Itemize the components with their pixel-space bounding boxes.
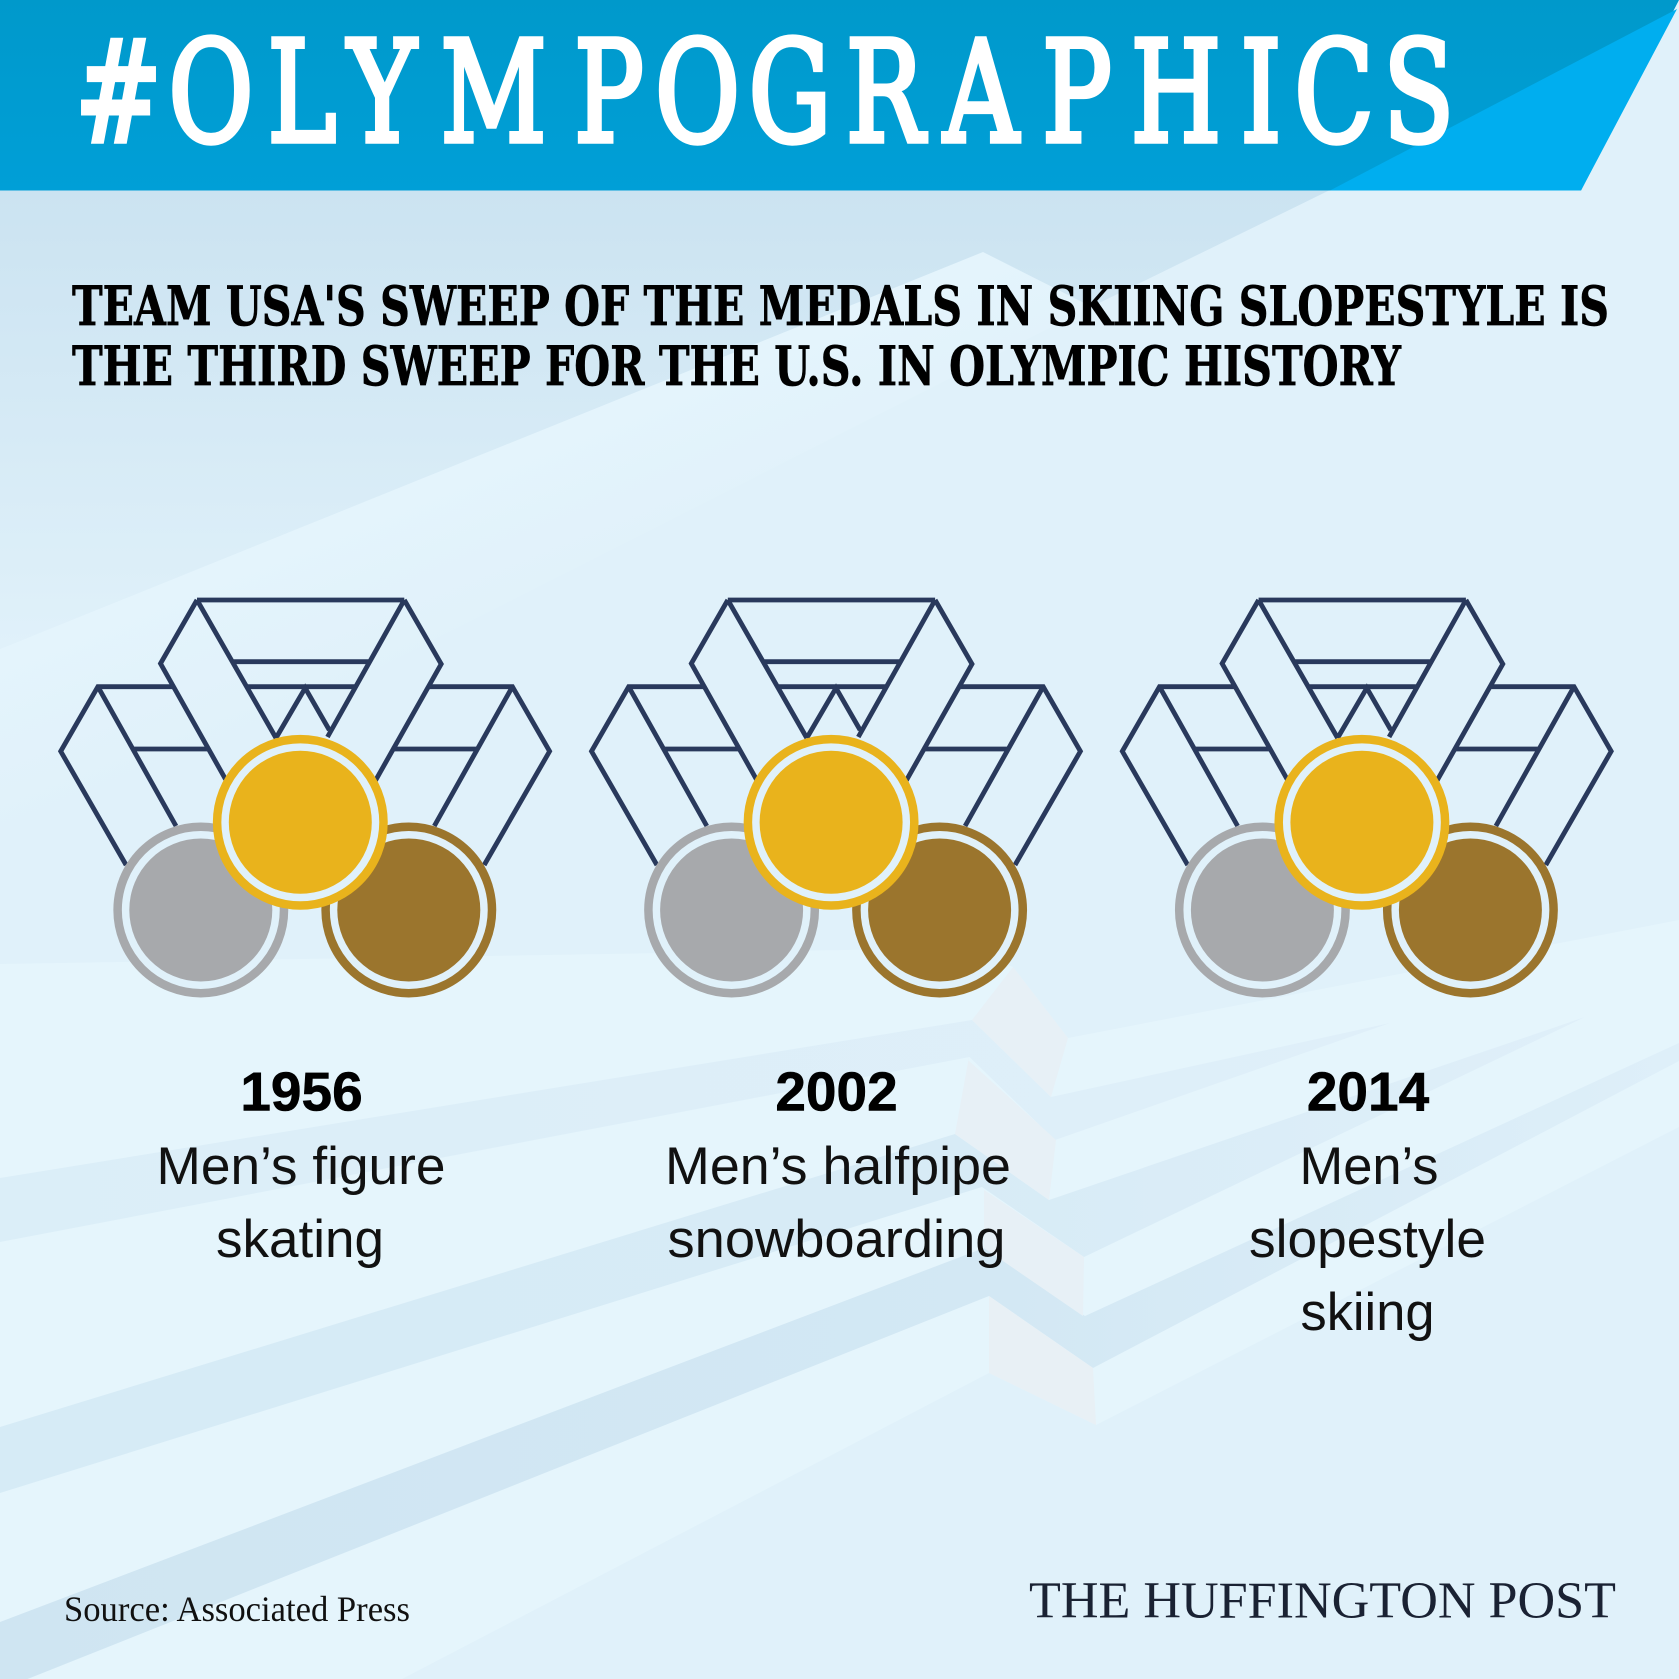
bronze medal: [856, 827, 1023, 993]
silver medal: [1179, 827, 1346, 993]
title: #OLYMPOGRAPHICS: [75, 13, 1454, 175]
label: 2014 men's slopestyle skiing: Men’s: [1300, 1137, 1438, 1196]
label: 1956 men's figure skating: Men’s figure: [156, 1137, 446, 1196]
bronze medal: [1387, 827, 1554, 993]
medal group: 1956: [61, 600, 550, 993]
logo: The Huffington Post: THE HUFFINGTON POST: [1029, 1572, 1616, 1630]
label: 2002 men's halfpipe snowboarding: snowboarding: [668, 1210, 1006, 1269]
label: 2014 men's slopestyle skiing: 2014: [1307, 1060, 1430, 1122]
medal group: 2014: [1122, 600, 1611, 993]
silver medal: [118, 827, 284, 993]
ribbons: [1122, 600, 1611, 865]
label: 1956 men's figure skating: [156, 1060, 446, 1269]
bronze medal: [326, 827, 492, 993]
silver medal: [648, 827, 815, 993]
gold medal: [1279, 739, 1445, 906]
label: 1956 men's figure skating: 1956: [240, 1060, 363, 1122]
ribbons: [592, 600, 1080, 865]
label: 2002 men's halfpipe snowboarding: Men’s halfpipe: [665, 1137, 1011, 1196]
source note: Source: Associated Press: [64, 1589, 410, 1629]
medal group: 2002: [592, 600, 1080, 993]
subtitle: [72, 274, 1609, 398]
ribbons: [61, 600, 550, 865]
header banner: [0, 0, 1679, 190]
label: 2002 men's halfpipe snowboarding: 2002: [775, 1060, 898, 1122]
label: 2002 men's halfpipe snowboarding: [665, 1060, 1011, 1269]
header banner: bright corner: [1330, 9, 1677, 190]
label: 2014 men's slopestyle skiing: [1249, 1060, 1486, 1342]
gold medal: [217, 739, 384, 906]
label: 1956 men's figure skating: skating: [216, 1210, 384, 1269]
gold medal: [748, 739, 914, 906]
label: 2014 men's slopestyle skiing: skiing: [1300, 1283, 1434, 1342]
label: 2014 men's slopestyle skiing: slopestyle: [1249, 1210, 1486, 1269]
